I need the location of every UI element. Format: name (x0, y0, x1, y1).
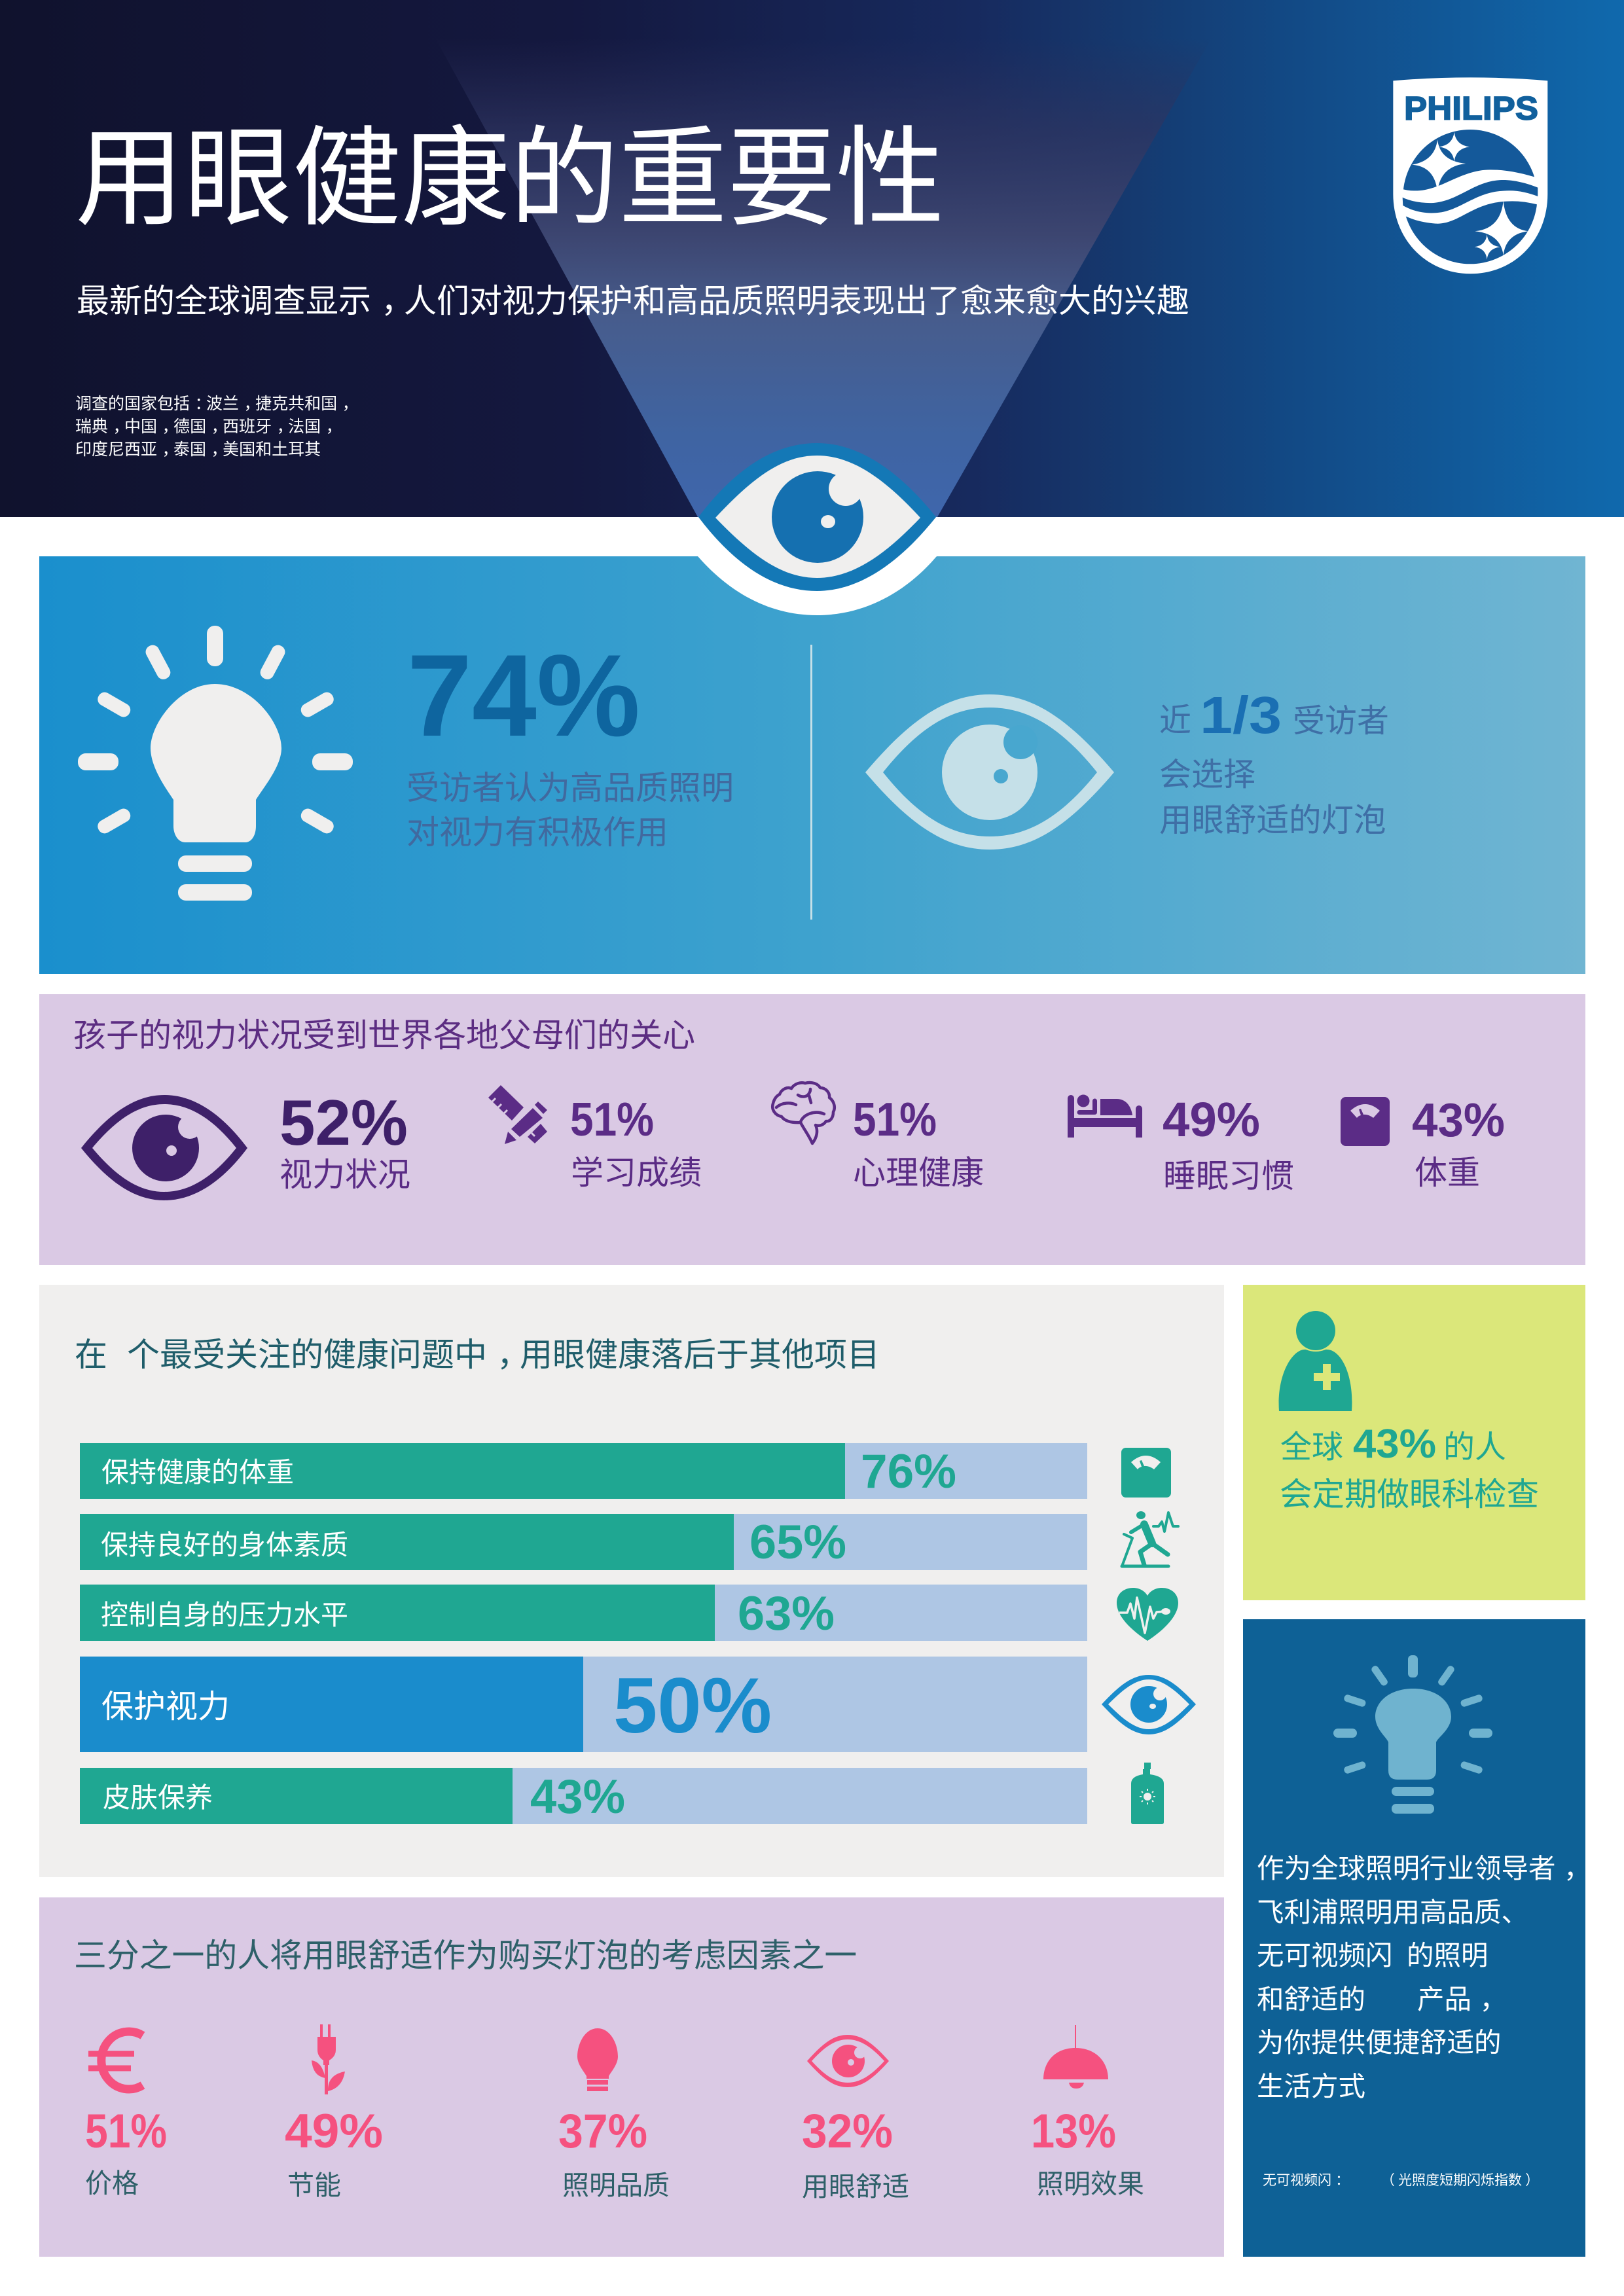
bar: stress control 63%: 控制自身的压力水平 (101, 1600, 348, 1630)
logo: Philips shield: PHILIPS (1404, 90, 1538, 127)
bar: healthy weight 76% (80, 1443, 1087, 1499)
footnote: （光照度短期闪烁指数） (1381, 2173, 1539, 2188)
statistic: 37% lighting quality: 照明品质 (562, 2170, 670, 2200)
panel: Philips leadership (1243, 1619, 1591, 2257)
bar: skin care 43%: 43% (530, 1770, 625, 1823)
bar: healthy weight 76%: 保持健康的体重 (101, 1457, 294, 1488)
statistic: 13% lighting effect: 照明效果 (1037, 2169, 1144, 2199)
icon: treadmill runner (1122, 1511, 1178, 1566)
bar: physical fitness 65%: 保持良好的身体素质 (101, 1530, 348, 1560)
panel: hero statistics (39, 556, 1585, 974)
icon: plug with leaves (312, 2024, 345, 2094)
text: leadership statement: 和舒适的 (1257, 1984, 1365, 2015)
icon: central eye (694, 443, 941, 615)
text: leadership statement: 作为全球照明行业领导者 ， (1257, 1853, 1591, 1884)
text: leadership statement: 无可视频闪 (1257, 1940, 1393, 1971)
statistic: 43% weight (1412, 1094, 1505, 1191)
icon: small bulb (577, 2028, 618, 2091)
bar: healthy weight 76%: 76% (861, 1445, 956, 1498)
statistic: 49% energy saving: 节能 (287, 2170, 341, 2200)
statistic: 51% school results (570, 1094, 702, 1191)
statistic: 43% weight: 体重 (1415, 1155, 1480, 1191)
light beam (435, 38, 1212, 517)
statistic: 32% eye comfort: 用眼舒适 (802, 2172, 909, 2202)
icon: light bulb (1333, 1655, 1492, 1814)
footnote: 无可视频闪 ： (1263, 2173, 1349, 2188)
statistic: nearly one third: 用眼舒适的灯泡 (1159, 802, 1386, 838)
text: 43% regular eye checks: 全球 (1280, 1430, 1343, 1465)
statistic: 49% sleep: 49% (1163, 1092, 1260, 1147)
icon: large light bulb (78, 626, 353, 901)
statistic: 13% lighting effect (1031, 2105, 1144, 2199)
panel: health concerns bar chart (39, 1285, 1224, 1877)
bar: physical fitness 65%: 65% (749, 1516, 846, 1569)
text: 43% regular eye checks (1280, 1422, 1539, 1513)
icon: eye (81, 1095, 247, 1200)
title: 用眼健康的重要性 (75, 118, 945, 240)
statistic: 32% eye comfort: 32% (802, 2105, 893, 2158)
icon: bed (1068, 1094, 1142, 1138)
statistic: 74% (406, 630, 734, 851)
panel: purchase factors (39, 1897, 1224, 2257)
statistic: 43% weight: 43% (1412, 1094, 1505, 1147)
statistic: 51% school results: 学习成绩 (571, 1155, 702, 1191)
bar: skin care 43% (80, 1768, 1087, 1824)
icon: heart with pulse (1117, 1588, 1178, 1641)
surveyed countries note: 印度尼西亚 ，泰国 ，美国和土耳其 (75, 440, 321, 459)
statistic: 51% price: 价格 (85, 2168, 139, 2198)
logo: Philips shield (1393, 77, 1547, 274)
surveyed countries note: 瑞典 ，中国 ，德国 ，西班牙 ，法国 ， (75, 418, 342, 436)
statistic: 37% lighting quality (558, 2105, 670, 2200)
subtitle: 最新的全球调查显示 ，人们对视力保护和高品质照明表现出了愈来愈大的兴趣 (77, 283, 1189, 319)
panel: eye check statistic (1243, 1285, 1585, 1600)
bar: protecting eyesight 50%: 保护视力 (101, 1689, 230, 1725)
statistic: 74%: 对视力有积极作用 (406, 814, 668, 851)
text: 43% regular eye checks: 的人 (1443, 1430, 1506, 1465)
statistic: 51% school results: 51% (570, 1094, 654, 1146)
statistic: 51% mental health: 51% (853, 1094, 937, 1146)
bar: protecting eyesight 50%: 50% (613, 1662, 772, 1749)
icon: outlined eye (865, 694, 1114, 850)
text: leadership statement: 为你提供便捷舒适的 (1257, 2027, 1502, 2058)
statistic: 52% vision: 52% (280, 1086, 408, 1158)
statistic: 49% sleep: 睡眠习惯 (1163, 1158, 1294, 1194)
statistic: 37% lighting quality: 37% (558, 2105, 647, 2158)
heading: 在 (75, 1336, 107, 1373)
statistic: 52% vision: 视力状况 (280, 1157, 410, 1193)
icon: euro (88, 2032, 143, 2089)
statistic: 74%: 受访者认为高品质照明 (406, 770, 734, 806)
text: leadership statement: 生活方式 (1257, 2071, 1365, 2102)
icon: person with medical cross (1279, 1311, 1352, 1411)
text: 43% regular eye checks: 会定期做眼科检查 (1280, 1477, 1539, 1513)
statistic: 49% sleep (1163, 1092, 1294, 1194)
bar: protecting eyesight 50% (80, 1657, 1087, 1752)
icon: pendant lamp (1043, 2025, 1108, 2089)
surveyed countries note (75, 395, 359, 459)
statistic: 51% price: 51% (85, 2105, 167, 2158)
text: leadership statement: 飞利浦照明用高品质、 (1257, 1897, 1528, 1928)
statistic: 51% mental health (853, 1094, 984, 1191)
header banner (0, 0, 1624, 517)
statistic: nearly one third: 会选择 (1159, 757, 1255, 793)
statistic: 49% energy saving (285, 2105, 383, 2200)
icon: blue eye (1102, 1675, 1196, 1734)
bar: skin care 43%: 皮肤保养 (103, 1782, 213, 1813)
icon: scale (1121, 1448, 1171, 1498)
heading: 三分之一的人将用眼舒适作为购买灯泡的考虑因素之一 (74, 1937, 857, 1974)
icon: weighing scale (1341, 1097, 1390, 1146)
divider line (810, 645, 812, 920)
bar: physical fitness 65% (80, 1514, 1087, 1570)
heading: 个最受关注的健康问题中 ，用眼健康落后于其他项目 (127, 1336, 880, 1373)
statistic: 51% mental health: 心理健康 (853, 1155, 984, 1191)
statistic: nearly one third: 近 (1159, 703, 1191, 738)
statistic: 13% lighting effect: 13% (1031, 2105, 1116, 2158)
heading: 孩子的视力状况受到世界各地父母们的关心 (73, 1017, 695, 1054)
icon: brain (772, 1083, 835, 1143)
bar: stress control 63% (80, 1585, 1087, 1641)
statistic: 74%: 74% (407, 630, 640, 761)
text: leadership statement: 产品 ， (1417, 1984, 1507, 2015)
surveyed countries note: 调查的国家包括 ：波兰 ，捷克共和国 ， (75, 395, 359, 413)
text: leadership statement: 的照明 (1407, 1940, 1489, 1971)
icon: sunscreen bottle (1131, 1763, 1164, 1824)
statistic: 49% energy saving: 49% (285, 2105, 383, 2158)
bar: stress control 63%: 63% (738, 1587, 835, 1640)
statistic: 51% price (85, 2105, 167, 2198)
statistic: nearly one third: 受访者 (1293, 704, 1389, 739)
icon: ruler and pencil (488, 1085, 547, 1144)
text: 43% regular eye checks: 43% (1353, 1422, 1436, 1467)
statistic: 32% eye comfort (802, 2105, 909, 2202)
icon: pink eye (807, 2035, 889, 2087)
footnote (1263, 2173, 1539, 2188)
statistic: 52% vision (280, 1086, 410, 1193)
statistic: nearly one third (1159, 686, 1389, 838)
panel: parents' concerns (39, 994, 1585, 1265)
statistic: nearly one third: 1/3 (1200, 686, 1282, 744)
text: leadership statement (1257, 1853, 1591, 2102)
